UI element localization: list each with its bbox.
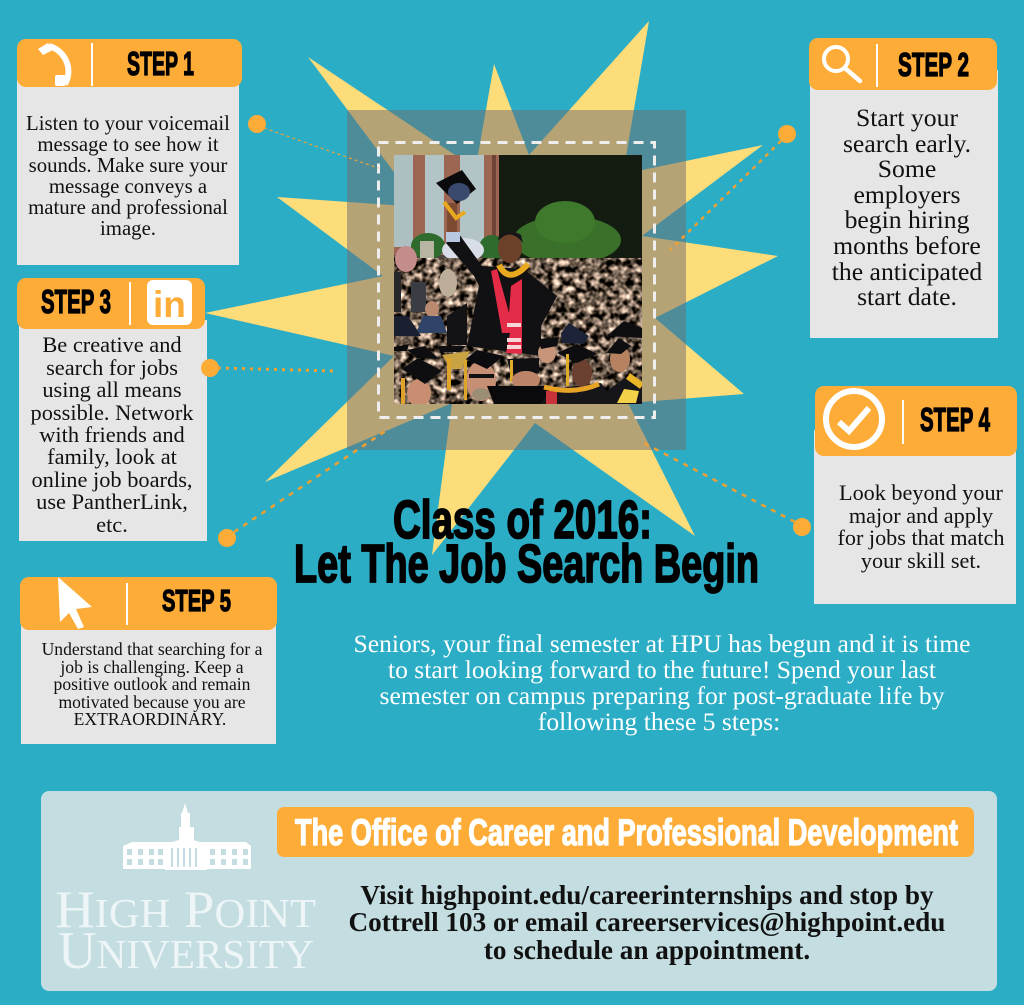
- crowd: [394, 258, 642, 404]
- panel: step 3: using all means: [42, 377, 182, 402]
- panel: step 2: Start your: [856, 103, 958, 132]
- panel: step 1: image.: [100, 217, 156, 240]
- panel: step 1: Listen to your voicemail: [26, 112, 230, 135]
- panel: step 1: sounds. Make sure your: [29, 154, 227, 177]
- contact text: Visit highpoint.edu/careerinternships and stop by: [360, 880, 934, 910]
- panel: step 2: Some: [878, 154, 936, 183]
- panel: step 5: EXTRAORDINARY.: [74, 709, 226, 729]
- panel: step 4: your skill set.: [861, 548, 981, 573]
- graduate gown: [446, 234, 557, 356]
- intro text: to start looking forward to the future! Spend your last: [388, 655, 936, 684]
- panel: career office footer: [41, 791, 997, 991]
- panel: step 3: use PantherLink,: [36, 489, 188, 514]
- panel: step 4: major and apply: [849, 503, 993, 528]
- intro text: [354, 629, 970, 736]
- panel: step 4: [814, 386, 1017, 604]
- contact text: Cottrell 103 or email careerservices@highpoint.edu: [349, 907, 945, 937]
- panel: step 3: [17, 278, 207, 541]
- panel: step 2: months before: [833, 231, 981, 260]
- icon: check circle: [826, 391, 882, 447]
- connector: step 4: [640, 441, 811, 536]
- panel: step 5: job is challenging. Keep a: [59, 657, 244, 677]
- icon: telephone: [38, 43, 68, 86]
- dashed frame: [378, 142, 654, 418]
- panel: step 3: family, look at: [47, 444, 178, 469]
- panel: step 2: [809, 38, 998, 338]
- connector: step 2: [670, 125, 796, 250]
- starburst: [205, 21, 778, 555]
- panel: step 5: Understand that searching for a: [42, 639, 263, 659]
- title: [294, 490, 759, 594]
- raised arm: [447, 203, 457, 235]
- intro text: semester on campus preparing for post-graduate life by: [380, 681, 945, 710]
- planter: [420, 241, 434, 258]
- green bush: [516, 220, 621, 258]
- panel: step 3: search for jobs: [46, 355, 178, 380]
- icon: LinkedIn: in: [153, 284, 186, 325]
- translucent frame: [347, 110, 686, 450]
- connector: step 3: [201, 359, 336, 377]
- brick building: [394, 155, 499, 255]
- panel: step 3: possible. Network: [31, 400, 194, 425]
- connector: step 1: [248, 115, 378, 168]
- seated graduates: [394, 321, 642, 407]
- panel: step 2: begin hiring: [845, 205, 970, 234]
- connector: step 5: [218, 428, 390, 547]
- logo: wordmark: HIGH POINT: [55, 881, 316, 939]
- icon: LinkedIn: [147, 280, 192, 325]
- panel: step 1: [17, 39, 242, 265]
- graduate head: [498, 233, 522, 263]
- panel: step 1: message conveys a: [49, 175, 207, 198]
- panel: step 5: STEP 5: [162, 583, 231, 618]
- logo: wordmark: UNIVERSITY: [58, 922, 314, 980]
- dark trees: [494, 155, 642, 265]
- intro text: Seniors, your final semester at HPU has begun and it is time: [354, 629, 970, 658]
- logo: wordmark: [55, 881, 316, 980]
- panel: step 4: for jobs that match: [838, 525, 1004, 550]
- red stole: [491, 269, 522, 354]
- icon: cursor: [58, 577, 92, 629]
- panel: step 1: mature and professional: [28, 196, 228, 219]
- logo: building: [123, 803, 251, 870]
- panel: step 3: online job boards,: [31, 467, 193, 492]
- panel: step 4: Look beyond your: [839, 480, 1004, 505]
- panel: step 5: [20, 577, 277, 744]
- contact text: [349, 880, 945, 965]
- mortarboard: [436, 170, 476, 204]
- panel: step 5: motivated because you are: [58, 692, 246, 712]
- panel: step 1: message to see how it: [37, 133, 219, 156]
- panel: step 2: the anticipated: [832, 257, 982, 286]
- collar: [499, 264, 528, 275]
- panel: step 3: etc.: [96, 512, 128, 537]
- title: Let The Job Search Begin: [294, 534, 759, 594]
- intro text: following these 5 steps:: [538, 707, 780, 736]
- panel: step 2: search early.: [843, 129, 971, 158]
- panel: step 3: with friends and: [39, 422, 185, 447]
- photo: graduate celebrating: [394, 155, 642, 407]
- icon: magnifier: [824, 47, 860, 81]
- panel: step 3: STEP 3: [41, 283, 111, 320]
- panel: step 5: positive outlook and remain: [54, 674, 251, 694]
- panel: step 2: start date.: [857, 282, 957, 311]
- panel: step 2: STEP 2: [898, 46, 969, 83]
- title: Class of 2016:: [393, 490, 652, 550]
- panel: step 2: employers: [853, 180, 961, 209]
- contact text: to schedule an appointment.: [484, 935, 810, 965]
- panel: step 1: STEP 1: [127, 45, 194, 82]
- panel: step 3: Be creative and: [42, 332, 182, 357]
